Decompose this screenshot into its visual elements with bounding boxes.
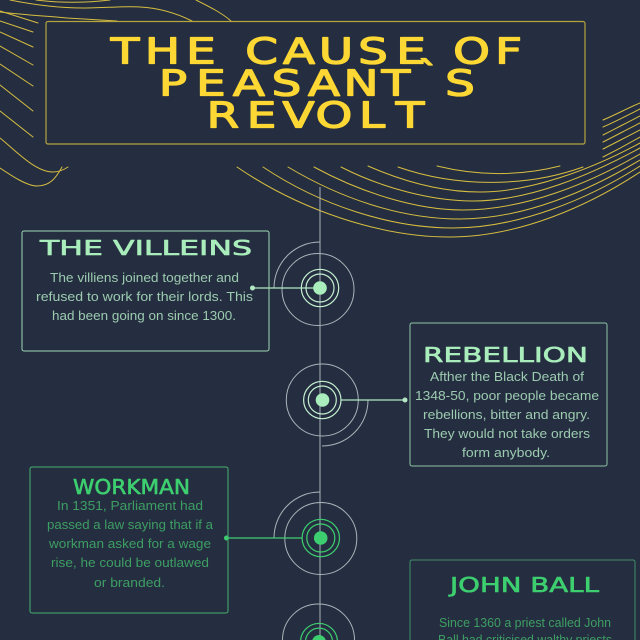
text: rebellion: rebellions, bitter and angry. [423, 407, 590, 422]
text: rebellion: form anybody. [462, 445, 550, 460]
text: workman [47, 498, 214, 590]
text: the villeins [36, 270, 254, 323]
contour lines: bottom and right [237, 103, 640, 237]
text: rebellion: They would not take orders [424, 426, 591, 441]
title: THE CAUSE OF [110, 30, 522, 72]
panel: the villeins [22, 231, 269, 351]
text: workman: or branded. [94, 575, 165, 590]
panel: rebellion [410, 323, 607, 466]
heading: john ball: JOHN BALL [447, 573, 600, 597]
title: REVOLT [207, 94, 425, 136]
heading: rebellion: REBELLION [423, 343, 588, 367]
title panel [46, 22, 585, 144]
text: workman: rise, he could be outlawed [51, 555, 209, 570]
contour lines: top left [0, 0, 231, 186]
text: workman: In 1351, Parliament had [57, 498, 203, 513]
text: the villeins: refused to work for their lords. This [36, 289, 254, 304]
timeline node 1 [250, 242, 354, 326]
panel: john ball [410, 560, 635, 640]
text: the villeins: The villiens joined together and [50, 270, 239, 285]
heading: the villeins: THE VILLEINS [38, 236, 252, 260]
text: john ball: Since 1360 a priest called John [439, 615, 611, 630]
title [110, 30, 522, 136]
text: the villeins: had been going on since 1300. [52, 308, 236, 323]
text: workman: workman asked for a wage [48, 536, 211, 551]
text: rebellion: Afther the Black Death of [430, 369, 584, 384]
text: rebellion: 1348-50, poor people became [415, 388, 599, 403]
text: workman: passed a law saying that if a [47, 517, 214, 532]
heading: workman: WORKMAN [73, 475, 190, 499]
timeline node 4 [282, 604, 354, 640]
timeline spine [319, 187, 321, 640]
timeline node 2 [286, 364, 408, 446]
panel: workman [30, 467, 228, 613]
text: john ball [438, 615, 612, 640]
timeline node 3 [224, 492, 357, 574]
text: rebellion [415, 369, 599, 460]
title: PEASANT`S [159, 53, 475, 104]
